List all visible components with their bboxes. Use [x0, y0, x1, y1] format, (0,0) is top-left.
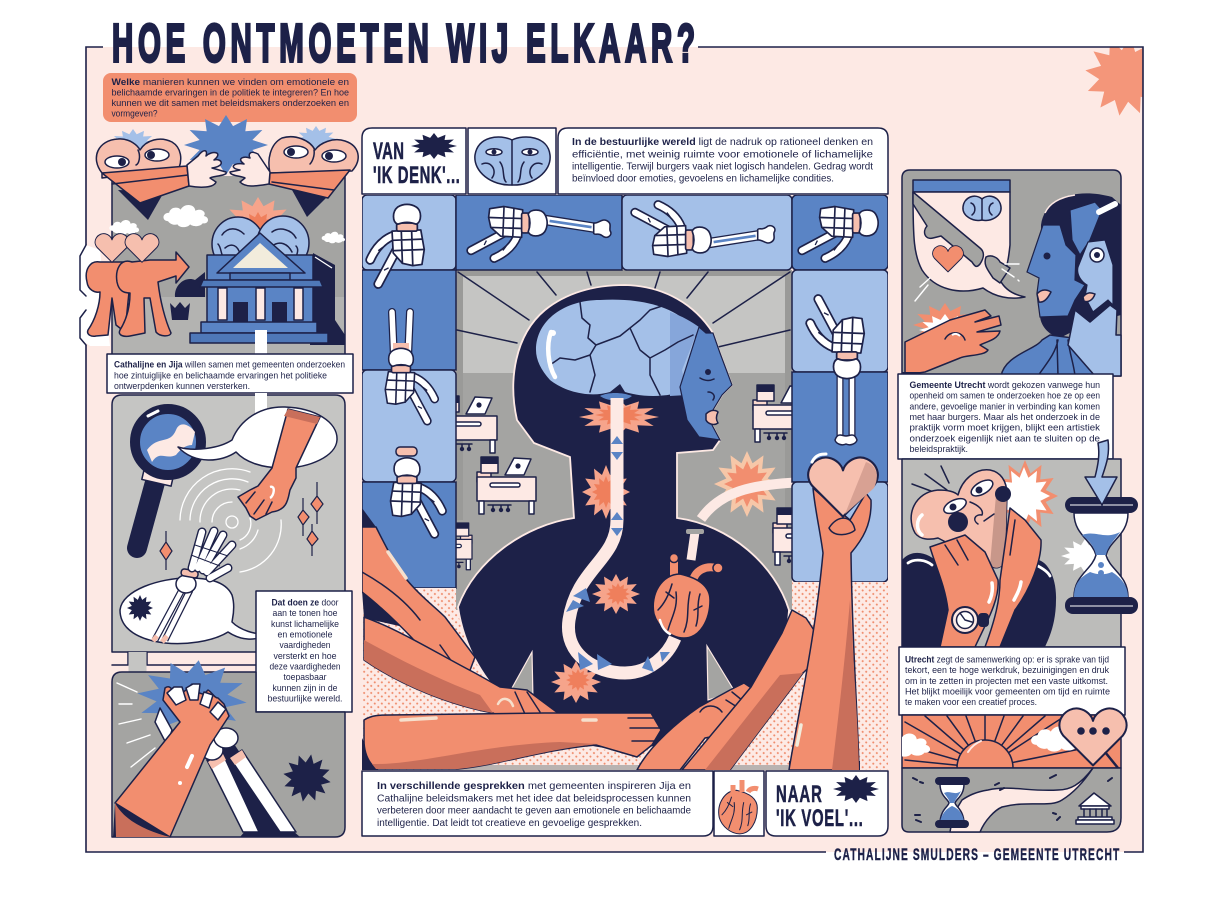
desks: [456, 384, 792, 570]
caption: Dat doen ze: kunst lichamelijke: [271, 618, 339, 629]
navy wedges between arms: [362, 508, 860, 770]
label: ik voel: 'IK VOEL'...: [776, 806, 863, 832]
caption: Gemeente Utrecht: beleidspraktijk.: [910, 443, 968, 454]
intro question box: belichaamde ervaringen in de politiek te integreren? En hoe: [112, 86, 349, 97]
text box: bestuurlijke wereld: [558, 128, 888, 194]
label: naar: NAAR: [776, 782, 822, 808]
intro question box: [103, 73, 357, 122]
caption: Dat doen ze: bestuurlijke wereld.: [268, 692, 342, 704]
arm: upper left resting hand: [362, 527, 475, 683]
intro question box: vormgeven?: [112, 108, 158, 119]
caption: Utrecht zegt op: te maken voor een creatief proces.: [905, 696, 1037, 707]
dotted floor centre: [456, 610, 792, 770]
caption: Dat doen ze: Dat doen ze door: [272, 596, 338, 608]
header box: van ik denk: [362, 128, 466, 194]
panel: left column: [79, 73, 358, 837]
caption: Dat doen ze: vaardigheden: [280, 639, 330, 650]
caption: Gemeente Utrecht: openheid om samen te onderzoeken hoe ze op een: [910, 390, 1100, 401]
arm: lower left reaching to the centre: [364, 713, 661, 769]
caption: Cathalijne en Jija: ontwerpdenken kunnen versterken.: [114, 380, 250, 391]
illustration: two heart heads with sleeves and hands: [96, 115, 358, 220]
text box: verschillende gesprekken: intelligentie. Dat leidt tot creatieve en gevoelige gesprekken.: [377, 818, 642, 829]
label: ik denk: 'IK DENK'...: [373, 163, 460, 189]
panel: central illustration: [362, 195, 888, 770]
arm: middle left reaching forward: [363, 616, 556, 713]
dotted floor: [362, 582, 888, 770]
rays around head: [457, 272, 790, 347]
text box: bestuurlijke wereld: In de bestuurlijke wereld ligt de nadruk op rationeel denken en: [572, 137, 873, 148]
spine tube with arrows: [566, 398, 675, 673]
pain bursts along nervous system: [551, 399, 780, 703]
intro question box: Welke manieren kunnen we vinden om emotionele en: [112, 76, 349, 87]
caption: Dat doen ze: [256, 591, 352, 712]
silhouette: head and body: [458, 285, 789, 750]
caption: Dat doen ze: kunnen zijn in de: [272, 682, 338, 693]
title: HOE ONTMOETEN WIJ ELKAAR?: [112, 14, 695, 74]
caption: Utrecht zegt op: om in te zetten in projecten met een vaste uitkomst.: [905, 675, 1108, 686]
illustration: handshake of arm and skeleton: [112, 656, 345, 837]
caption: Dat doen ze: toepasbaar: [284, 671, 326, 682]
text box: bestuurlijke wereld: intelligentie. Terwijl burgers vaak niet logisch handelen. Gedrag wordt: [572, 162, 873, 172]
icon: brain face: [468, 128, 556, 194]
caption: Gemeente Utrecht: andere, gevoelige manier in verbinding kan komen: [910, 400, 1100, 411]
panel: right column: [883, 170, 1138, 832]
caption: Dat doen ze: en emotionele: [278, 628, 332, 640]
illustration: sunset landscape with path: [883, 708, 1127, 832]
anatomical heart: [653, 482, 806, 638]
arm: right reaching in: [682, 610, 827, 770]
arm: raised holding heart: [789, 454, 878, 770]
caption: Gemeente Utrecht: praktijk vorm moet krijgen, blijkt een artistiek: [910, 422, 1100, 433]
frame lines: [86, 47, 1143, 852]
caption: Utrecht zegt op: tekort, een te hoge werkdruk, bezuinigingen en druk: [905, 664, 1109, 675]
footer credit: CATHALIJNE SMULDERS – GEMEENTE UTRECHT: [834, 846, 1120, 864]
central gray room: [456, 270, 792, 613]
icon: navy burst: [833, 775, 879, 803]
illustration: two heart-headed figures with arrow: [79, 234, 189, 346]
caption: Utrecht zegt op: [899, 647, 1125, 715]
intro question box: kunnen we dit samen met beleidsmakers onderzoeken en: [112, 97, 349, 108]
text box: verschillende gesprekken: verbeteren door meer aandacht te geven aan emotionele en belichaamde: [377, 806, 691, 817]
caption: Gemeente Utrecht: [898, 374, 1113, 459]
icon: navy burst: [411, 133, 457, 159]
illustration: heart head held by hands: [902, 459, 1121, 647]
gray triangles between arms: [512, 646, 735, 700]
caption: Cathalijne en Jija: hoe zintuiglijke en belichaamde ervaringen het politieke: [114, 369, 327, 380]
illustration: magnifier, arm and skeleton hand: [112, 393, 345, 672]
text box: verschillende gesprekken: In verschillende gesprekken met gemeenten inspireren Jija en: [377, 781, 691, 792]
caption: Dat doen ze: deze vaardigheden: [270, 660, 340, 672]
icon: corner starburst: [1086, 48, 1142, 116]
label: van: VAN: [373, 139, 404, 165]
pink frame panel: [86, 47, 1143, 852]
caption: Gemeente Utrecht: Gemeente Utrecht wordt gekozen vanwege hun: [910, 379, 1100, 390]
caption: Gemeente Utrecht: onderzoek eigenlijk niet aan te sluiten op de: [910, 432, 1100, 443]
icon: small anatomical heart: [714, 771, 764, 836]
skeleton hands: [370, 204, 878, 534]
caption: Cathalijne en Jija: [107, 354, 353, 393]
icon: hourglass with arrow: [1061, 440, 1138, 614]
illustration: speech bubble and two faces: [902, 170, 1121, 376]
text box: verschillende gesprekken: Cathalijne beleidsmakers met het idee dat beleidsprocessen kunnen: [377, 793, 691, 804]
caption: Cathalijne en Jija: Cathalijne en Jija willen samen met gemeenten onderzoeken: [114, 359, 345, 370]
arm: lower right reaching out: [636, 684, 750, 770]
caption: Utrecht zegt op: Utrecht zegt de samenwerking op: er is sprake van tijd: [905, 654, 1109, 664]
caption: Gemeente Utrecht: met haar burgers. Maar als het onderzoek in de: [910, 411, 1100, 422]
text box: bestuurlijke wereld: beïnvloed door emoties, gevoelens en lichamelijke condities.: [572, 174, 834, 185]
text box: verschillende gesprekken: [362, 771, 713, 836]
caption: Dat doen ze: versterkt en hoe: [274, 650, 336, 661]
brain in head: [536, 300, 732, 440]
header box: naar ik voel: [766, 771, 888, 836]
blue tiles: [362, 195, 888, 588]
panel: skeleton hands grid: [362, 195, 888, 770]
caption: Dat doen ze: aan te tonen hoe: [272, 607, 338, 618]
text box: bestuurlijke wereld: efficiëntie, met weinig ruimte voor emotionele of lichamelijke: [572, 149, 873, 160]
caption: Utrecht zegt op: Het blijkt moeilijk voor gemeenten om tijd en ruimte: [905, 686, 1110, 696]
illustration: government building scene: [109, 176, 345, 356]
